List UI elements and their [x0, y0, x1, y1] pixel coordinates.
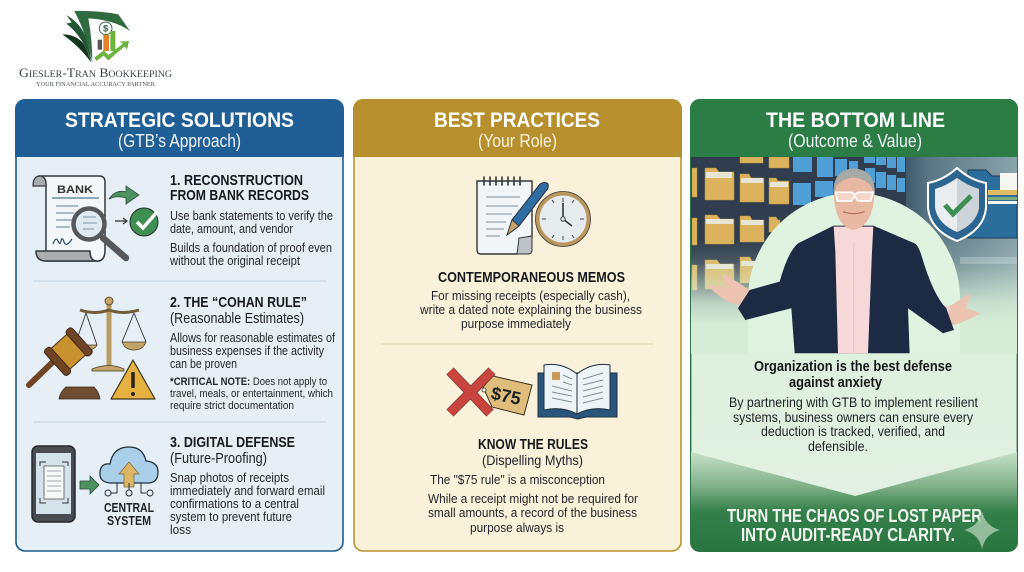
step 3 text: (Future-Proofing)	[170, 450, 267, 467]
outcome text: deduction is tracked, verified, and	[761, 424, 945, 439]
rules text: KNOW THE RULES	[478, 436, 588, 453]
step 2 text	[170, 294, 335, 412]
icon: crossed out $75 tag: $75	[489, 383, 523, 409]
icon label: SYSTEM	[107, 513, 151, 528]
suit	[738, 226, 954, 353]
icon label: CENTRAL	[104, 500, 154, 515]
panel: best practices	[353, 99, 682, 551]
outcome text: Organization is the best defense	[754, 358, 952, 375]
company name: Giesler-Tran Bookkeeping	[19, 66, 173, 80]
step 3 text: confirmations to a central	[170, 497, 299, 511]
step 2 text: Allows for reasonable estimates of	[170, 331, 335, 345]
background circle	[748, 193, 960, 354]
call to action	[727, 509, 982, 541]
logo	[19, 11, 173, 88]
memos text: For missing receipts (especially cash),	[431, 289, 630, 303]
memos text: purpose immediately	[461, 317, 572, 331]
panel header	[353, 99, 682, 157]
step 3 text: Snap photos of receipts	[170, 471, 289, 485]
outcome text: systems, business owners can ensure every	[733, 410, 973, 425]
subheading: (Outcome & Value)	[788, 131, 922, 151]
person with open arms	[708, 168, 981, 353]
logo mark	[62, 11, 130, 62]
heading: THE BOTTOM LINE	[766, 109, 945, 132]
step 2 text: require strict documentation	[170, 400, 294, 412]
outcome text	[729, 358, 978, 454]
subheading: (GTB’s Approach)	[118, 131, 241, 151]
icon: phone to central system	[32, 446, 158, 528]
step 1 text: 1. RECONSTRUCTION	[170, 172, 303, 189]
memos text: CONTEMPORANEOUS MEMOS	[438, 269, 625, 286]
icon: scales, gavel and warning	[29, 297, 155, 399]
panel: strategic solutions	[15, 99, 344, 551]
step 1 text: Builds a foundation of proof even	[170, 241, 332, 255]
icon: bank record check	[33, 176, 158, 261]
panel header	[15, 99, 344, 157]
rules text: The "$75 rule" is a misconception	[430, 473, 605, 487]
logo mark: $	[103, 24, 109, 34]
icon: security shield	[928, 168, 986, 241]
memos text	[419, 269, 642, 331]
step 3 text: 3. DIGITAL DEFENSE	[170, 434, 295, 451]
rules text: (Dispelling Myths)	[482, 452, 583, 468]
shirt	[834, 227, 873, 353]
step 1 text	[169, 172, 333, 268]
rules text: While a receipt might not be required for	[428, 492, 638, 506]
step 1 text: Use bank statements to verify the	[170, 209, 333, 223]
icon: open rule book	[538, 364, 617, 419]
step 2 text: (Reasonable Estimates)	[170, 310, 304, 327]
call to action: INTO AUDIT-READY CLARITY.	[741, 525, 955, 545]
step 2 text: 2. THE “COHAN RULE”	[170, 294, 307, 311]
subheading: (Your Role)	[478, 131, 557, 151]
step 3 text: system to prevent future	[170, 510, 292, 524]
step 2 text: can be proven	[170, 357, 237, 371]
step 3 text	[170, 434, 325, 537]
tagline: YOUR FINANCIAL ACCURACY PARTNER	[36, 81, 156, 88]
step 3 text: loss	[170, 523, 191, 537]
step 2 text: travel, meals, or entertainment, which	[170, 388, 333, 400]
step 1 text: date, amount, and vendor	[170, 222, 293, 236]
heading: STRATEGIC SOLUTIONS	[65, 109, 294, 132]
icon: bank record check: BANK	[57, 184, 93, 196]
panel: the bottom line	[690, 99, 1018, 551]
heading: BEST PRACTICES	[434, 109, 600, 132]
icon: notepad, pen and clock	[477, 177, 590, 254]
icon: crossed out $75 tag	[450, 371, 532, 415]
outcome text: defensible.	[808, 439, 868, 454]
icon label	[104, 500, 154, 528]
panel header	[690, 99, 1018, 157]
outcome text: By partnering with GTB to implement resilient	[729, 395, 978, 410]
background: folder wall	[691, 157, 1017, 354]
icon: sparkle	[964, 511, 1000, 549]
step 1 text: without the original receipt	[169, 254, 300, 268]
rules text	[428, 436, 638, 535]
step 2 text: business expenses if the activity	[170, 344, 325, 358]
rules text: small amounts, a record of the business	[428, 506, 637, 520]
step 3 text: immediately and forward email	[170, 484, 325, 498]
head	[834, 178, 875, 230]
left hand	[708, 273, 750, 306]
step 1 text: FROM BANK RECORDS	[170, 187, 309, 204]
right hand	[948, 294, 980, 325]
step 2 text: *CRITICAL NOTE: Does not apply to	[170, 376, 327, 388]
glasses	[836, 192, 873, 201]
chevron banner	[691, 452, 1017, 551]
outcome text: against anxiety	[789, 374, 883, 391]
rules text: purpose always is	[470, 521, 564, 535]
memos text: write a dated note explaining the business	[419, 303, 642, 317]
